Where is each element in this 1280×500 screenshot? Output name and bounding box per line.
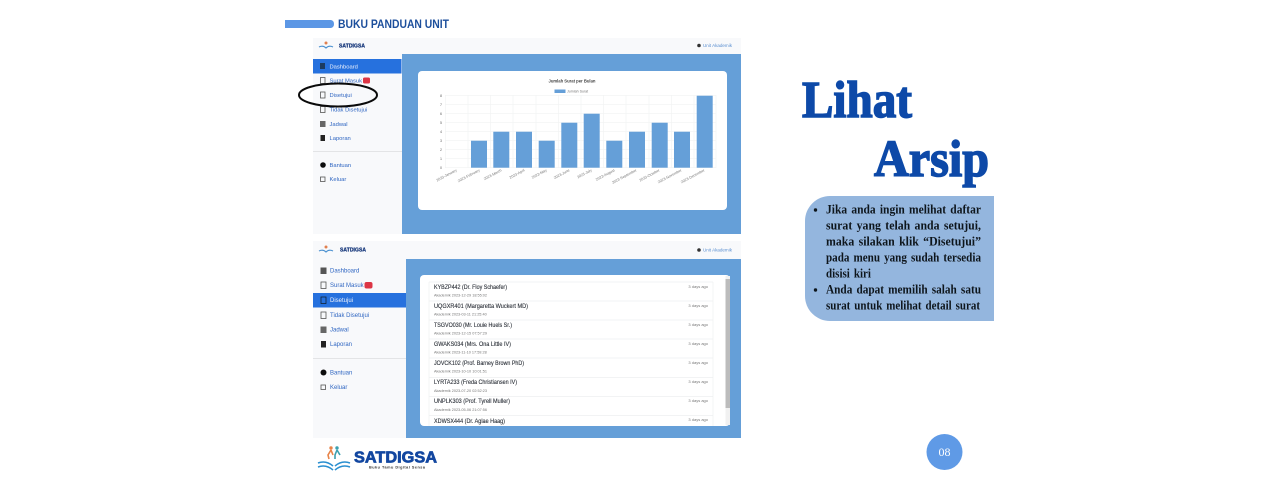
list rows text: XDWSX444 (Dr. Aglae Haag) (434, 418, 505, 425)
sidebar menu: Disetujui (330, 93, 352, 99)
logo: SATDIGSA: Buku Tamu Digital Sensa (369, 466, 426, 470)
user label: Unit Akademik (703, 248, 733, 254)
sidebar menu: Laporan (330, 136, 351, 142)
list rows dates: Akademik 2023-11-10 17:59:28 (434, 350, 487, 354)
list rows dates: Akademik 2023-10-10 10:01:51 (434, 370, 487, 374)
sidebar menu: Jadwal (330, 328, 349, 334)
page number badge (926, 434, 962, 470)
sidebar menu: Tidak Disetujui (330, 108, 367, 114)
y axis labels: 8 (440, 94, 442, 98)
y axis labels (440, 94, 442, 170)
title: Lihat Arsip (802, 72, 989, 188)
logo: SATDIGSA (318, 446, 437, 470)
list rows dates: Akademik 2023-05-06 21:07:56 (434, 408, 487, 412)
list rows text: JOVCK102 (Prof. Barney Brown PhD) (434, 360, 524, 367)
list rows time: 3 days ago (688, 417, 709, 422)
list rows dates: Akademik 2023-03-11 21:25:40 (434, 312, 487, 316)
sidebar menu: Surat Masuk (330, 78, 362, 84)
chart card (418, 71, 727, 210)
chart gridlines (445, 95, 716, 168)
list rows time: 3 days ago (688, 303, 709, 308)
list rows text: UNPLK303 (Prof. Tyrell Muller) (434, 398, 510, 405)
sidebar menu: Tidak Disetujui (330, 313, 369, 319)
chart card: Jumlah Surat per Bulan (548, 78, 596, 84)
x axis labels: 2023-August (595, 168, 615, 182)
bullet text: surat yang telah anda setujui, (826, 217, 981, 232)
title: Lihat Arsip: Arsip (874, 131, 989, 188)
sidebar menu: Surat Masuk (330, 283, 365, 289)
header logo: SATDIGSA (340, 248, 366, 254)
list rows text: UQGXR401 (Margaretta Wuckert MD) (434, 303, 528, 310)
y axis labels: 1 (440, 157, 442, 161)
sidebar menu (313, 59, 402, 183)
x axis labels (436, 168, 706, 185)
list rows time: 3 days ago (688, 341, 709, 346)
sidebar menu: Laporan (330, 342, 352, 348)
y axis labels: 2 (440, 148, 442, 152)
user label (697, 248, 733, 254)
list card (420, 275, 730, 426)
sidebar menu: Dashboard (330, 269, 359, 275)
icon: open book with figures (318, 446, 350, 470)
bullet text: Jika anda ingin melihat daftar (826, 201, 981, 216)
list rows time (688, 284, 709, 422)
list rows time: 3 days ago (688, 284, 709, 289)
sidebar menu: Bantuan (330, 371, 352, 377)
list rows time: 3 days ago (688, 398, 709, 403)
list rows text: GWAKS034 (Mrs. Ona Little IV) (434, 341, 511, 348)
x axis labels: 2023-June (553, 168, 570, 180)
y axis labels: 7 (440, 103, 442, 107)
heading: buku panduan unit: BUKU PANDUAN UNIT (338, 17, 450, 31)
y axis labels: 0 (440, 166, 442, 170)
sidebar menu: Dashboard (330, 64, 358, 70)
list rows dates: Akademik 2023-07-20 02:52:23 (434, 389, 487, 393)
x axis labels: 2023-November (657, 168, 683, 184)
x axis labels: 2023-March (483, 168, 502, 181)
bars (471, 96, 713, 168)
header logo (319, 246, 366, 254)
header logo (319, 42, 365, 50)
list rows dates: Akademik 2023-12-15 07:57:29 (434, 332, 487, 336)
x axis labels: 2023-October (639, 168, 661, 182)
page number badge: 08 (938, 445, 950, 459)
bullet text: pada menu yang sudah tersedia (826, 249, 981, 264)
bullet text: disisi kiri (826, 265, 871, 280)
list rows time: 3 days ago (688, 322, 709, 327)
x axis labels: 2023-September (611, 168, 638, 185)
sidebar menu: Keluar (330, 385, 347, 391)
y axis labels: 6 (440, 112, 442, 116)
x axis labels: 2023-January (436, 168, 458, 182)
screenshot: approved letters list (313, 241, 741, 438)
bullet text: maka silakan klik “Disetujui” (826, 233, 981, 248)
panel: instructions (805, 196, 994, 321)
sidebar menu: Bantuan (330, 163, 351, 169)
list rows text: KYBZP442 (Dr. Floy Schaefer) (434, 284, 507, 291)
list rows text (434, 284, 528, 425)
sidebar menu: Disetujui (330, 298, 353, 304)
y axis labels: 4 (440, 130, 442, 134)
sidebar menu: Keluar (330, 177, 346, 183)
logo: SATDIGSA: SATDIGSA (354, 450, 437, 466)
x axis labels: 2023-July (576, 168, 593, 179)
user label: Unit Akademik (703, 43, 733, 49)
y axis labels: 3 (440, 139, 442, 143)
header logo: SATDIGSA (339, 44, 365, 50)
screenshot: dashboard chart (313, 38, 741, 234)
y axis labels: 5 (440, 121, 442, 125)
list rows time: 3 days ago (688, 360, 709, 365)
sidebar menu: Jadwal (330, 122, 348, 128)
x axis labels: 2023-December (680, 168, 706, 184)
list rows text: LYRTA233 (Freda Christiansen IV) (434, 379, 517, 386)
list rows dates: Akademik 2023-12-29 18:55:02 (434, 294, 487, 298)
list rows text: TSGVO030 (Mr. Louie Huels Sr.) (434, 322, 512, 329)
list rows time: 3 days ago (688, 379, 709, 384)
x axis labels: 2023-February (457, 168, 481, 183)
heading: buku panduan unit (285, 17, 450, 31)
list rows dates (434, 294, 487, 412)
title: Lihat Arsip: Lihat (802, 72, 913, 129)
user label (697, 43, 733, 49)
x axis labels: 2023-April (509, 168, 526, 180)
bullet text: Anda dapat memilih salah satu (826, 281, 981, 296)
callout: ellipse around Disetujui (299, 84, 377, 106)
sidebar menu (313, 268, 406, 391)
chart card: Jumlah Surat (567, 90, 588, 94)
scrollbar (726, 276, 730, 425)
bullet text: surat untuk melihat detail surat (826, 297, 981, 312)
row dividers (429, 282, 713, 426)
bullet text (814, 201, 981, 312)
x axis labels: 2023-May (531, 168, 548, 180)
